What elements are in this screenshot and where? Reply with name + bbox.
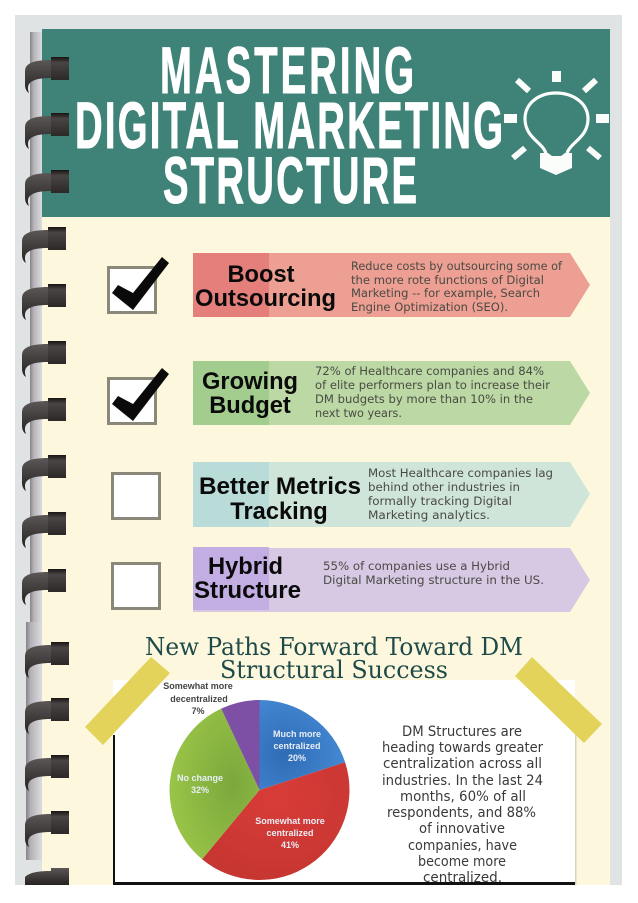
- text: growing budget description: [315, 364, 550, 420]
- pie label: somewhat more decentralized: 7%: [191, 706, 205, 716]
- section heading: [145, 633, 523, 684]
- heading: better metrics tracking: Tracking: [230, 499, 328, 525]
- pie label: somewhat more decentralized: decentralized: [170, 694, 228, 704]
- text: DM structures paragraph: of innovative: [419, 821, 505, 837]
- pie label: no change: No change: [177, 773, 223, 783]
- text: growing budget description: next two years.: [315, 406, 402, 420]
- text: DM structures paragraph: become more: [418, 854, 506, 870]
- heading: growing budget: [202, 369, 298, 419]
- pie label: somewhat more decentralized: Somewhat more: [163, 681, 233, 691]
- pie label: somewhat more centralized: 41%: [281, 840, 299, 850]
- pie label: much more centralized: 20%: [288, 753, 306, 763]
- text: DM structures paragraph: industries. In the last 24: [382, 773, 543, 789]
- title: [75, 34, 503, 218]
- panel: better metrics tracking: [193, 462, 590, 527]
- tape: right: [515, 657, 602, 743]
- heading: hybrid structure: Hybrid: [208, 554, 283, 580]
- section heading: Structural Success: [220, 656, 448, 684]
- text: DM structures paragraph: companies, have: [408, 838, 517, 854]
- text: better metrics description: [368, 466, 553, 522]
- text: better metrics description: formally tracking Digital: [368, 494, 512, 508]
- panel: hybrid structure: [193, 547, 590, 612]
- icon: empty box 3: [112, 474, 160, 518]
- pie label: much more centralized: centralized: [273, 741, 321, 751]
- text: growing budget description: DM budgets by more than 10% in the: [315, 392, 533, 406]
- icon: checked box 2: [108, 368, 169, 424]
- text: hybrid structure description: [323, 559, 544, 587]
- text: boost outsourcing description: Reduce costs by outsourcing some of: [351, 259, 563, 273]
- notebook spine: [26, 32, 42, 860]
- panel: growing budget: [193, 361, 590, 425]
- text: hybrid structure description: 55% of companies use a Hybrid: [323, 559, 510, 573]
- title: STRUCTURE: [163, 144, 417, 218]
- text: hybrid structure description: Digital Marketing structure in the US.: [323, 573, 544, 587]
- text: DM structures paragraph: centralized.: [423, 870, 502, 886]
- section heading: New Paths Forward Toward DM: [145, 633, 523, 661]
- text: DM structures paragraph: [382, 724, 543, 886]
- pie label: much more centralized: Much more: [273, 729, 321, 739]
- panel: boost outsourcing: [193, 253, 590, 317]
- title: MASTERING: [160, 34, 414, 108]
- card bottom edge: [113, 882, 575, 885]
- pie label: somewhat more centralized: centralized: [266, 828, 314, 838]
- text: DM structures paragraph: months, 60% of all: [400, 789, 526, 805]
- text: DM structures paragraph: DM Structures are: [402, 724, 522, 740]
- heading: boost outsourcing: Outsourcing: [195, 286, 336, 312]
- text: DM structures paragraph: centralization across all: [383, 756, 542, 772]
- heading: boost outsourcing: [195, 262, 336, 312]
- heading: hybrid structure: [194, 554, 301, 604]
- text: boost outsourcing description: [351, 259, 563, 314]
- text: boost outsourcing description: the more rote functions of Digital: [351, 273, 544, 287]
- icon: checked box 1: [108, 257, 169, 312]
- text: DM structures paragraph: respondents, and 88%: [387, 805, 536, 821]
- pie label: no change: 32%: [191, 785, 209, 795]
- title banner: [42, 29, 610, 218]
- text: growing budget description: of elite performers plan to increase their: [315, 378, 550, 392]
- pie label: somewhat more centralized: Somewhat more: [255, 816, 325, 826]
- icon: empty box 4: [112, 564, 160, 608]
- icon: light bulb: [504, 71, 609, 175]
- panel: white note card: [113, 680, 576, 885]
- tape: left: [85, 657, 170, 745]
- heading: better metrics tracking: [199, 474, 361, 525]
- heading: growing budget: Growing: [202, 369, 298, 395]
- pie chart: [163, 681, 349, 880]
- spiral binding rings: [22, 57, 69, 885]
- heading: boost outsourcing: Boost: [227, 262, 295, 288]
- heading: hybrid structure: Structure: [194, 578, 301, 604]
- text: growing budget description: 72% of Healthcare companies and 84%: [315, 364, 544, 378]
- heading: better metrics tracking: Better Metrics: [199, 474, 361, 500]
- text: better metrics description: Marketing analytics.: [368, 508, 490, 522]
- text: DM structures paragraph: heading towards greater: [382, 740, 543, 756]
- text: better metrics description: behind other industries in: [368, 480, 520, 494]
- heading: growing budget: Budget: [209, 393, 291, 419]
- title: DIGITAL MARKETING: [75, 89, 503, 163]
- text: boost outsourcing description: Engine Optimization (SEO).: [351, 300, 508, 314]
- text: better metrics description: Most Healthcare companies lag: [368, 466, 553, 480]
- text: boost outsourcing description: Marketing -- for example, Search: [351, 286, 540, 300]
